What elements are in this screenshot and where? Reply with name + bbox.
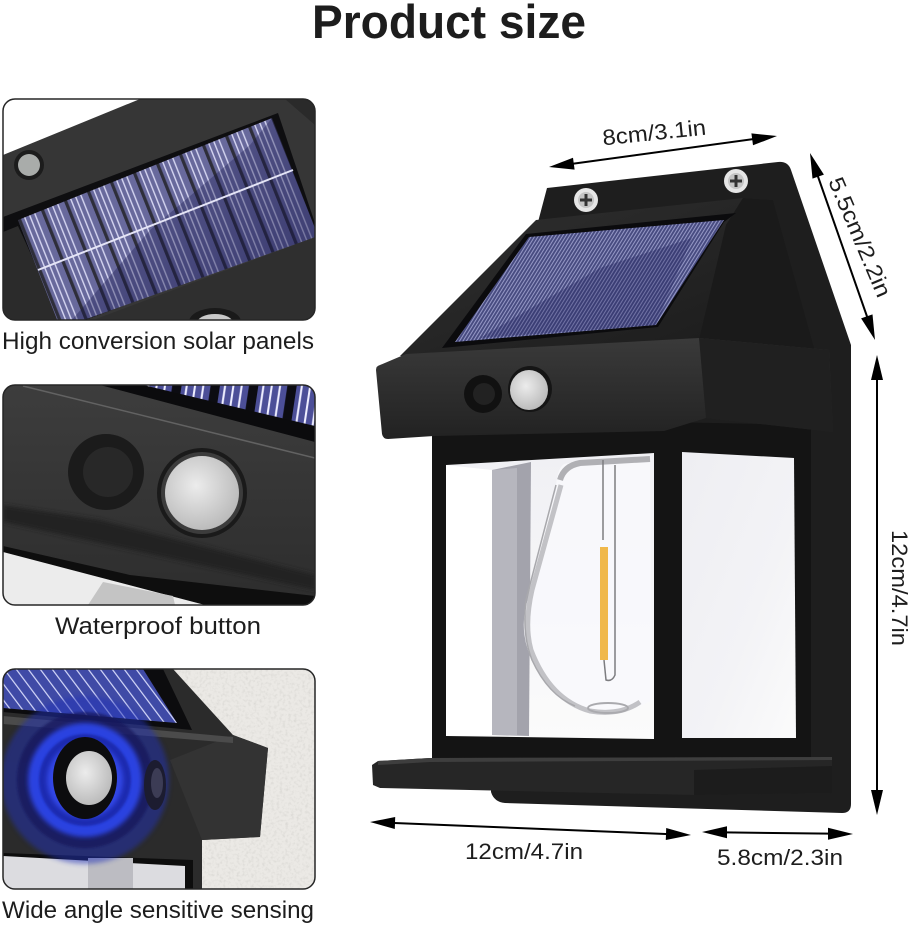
lamp band [376, 338, 833, 439]
panel: wide angle sensing close-up [1, 669, 315, 889]
button and motion sensor [464, 366, 552, 413]
side window [682, 452, 796, 738]
dimension: side depth: 5.8cm/2.3in [717, 845, 843, 870]
illustration: solar wall lamp [372, 162, 851, 813]
lamp shelf [372, 757, 832, 795]
dimension: front width [370, 817, 691, 864]
dimension: body height [871, 355, 911, 815]
solar panel [455, 220, 724, 342]
dimension: top width [549, 115, 777, 170]
caption: solar panels: High conversion solar panels [2, 328, 314, 355]
caption: waterproof button: Waterproof button [55, 613, 261, 640]
screw left [574, 188, 598, 212]
caption: wide angle sensing: Wide angle sensitive sensing [2, 897, 314, 924]
light bulb [524, 457, 652, 713]
lamp roof [400, 198, 815, 356]
dimension: front width: 12cm/4.7in [465, 839, 583, 864]
dimension: roof depth: 5.5cm/2.2in [823, 173, 896, 301]
screw right [724, 169, 748, 193]
dimension: side depth [702, 826, 853, 870]
panel: waterproof button close-up [3, 385, 315, 605]
lantern body [432, 422, 811, 760]
dimension: roof depth [810, 153, 896, 340]
panel: solar panels close-up [3, 99, 318, 336]
lamp back plate [491, 162, 851, 813]
dimension: top width: 8cm/3.1in [601, 115, 707, 150]
front window [446, 453, 654, 739]
